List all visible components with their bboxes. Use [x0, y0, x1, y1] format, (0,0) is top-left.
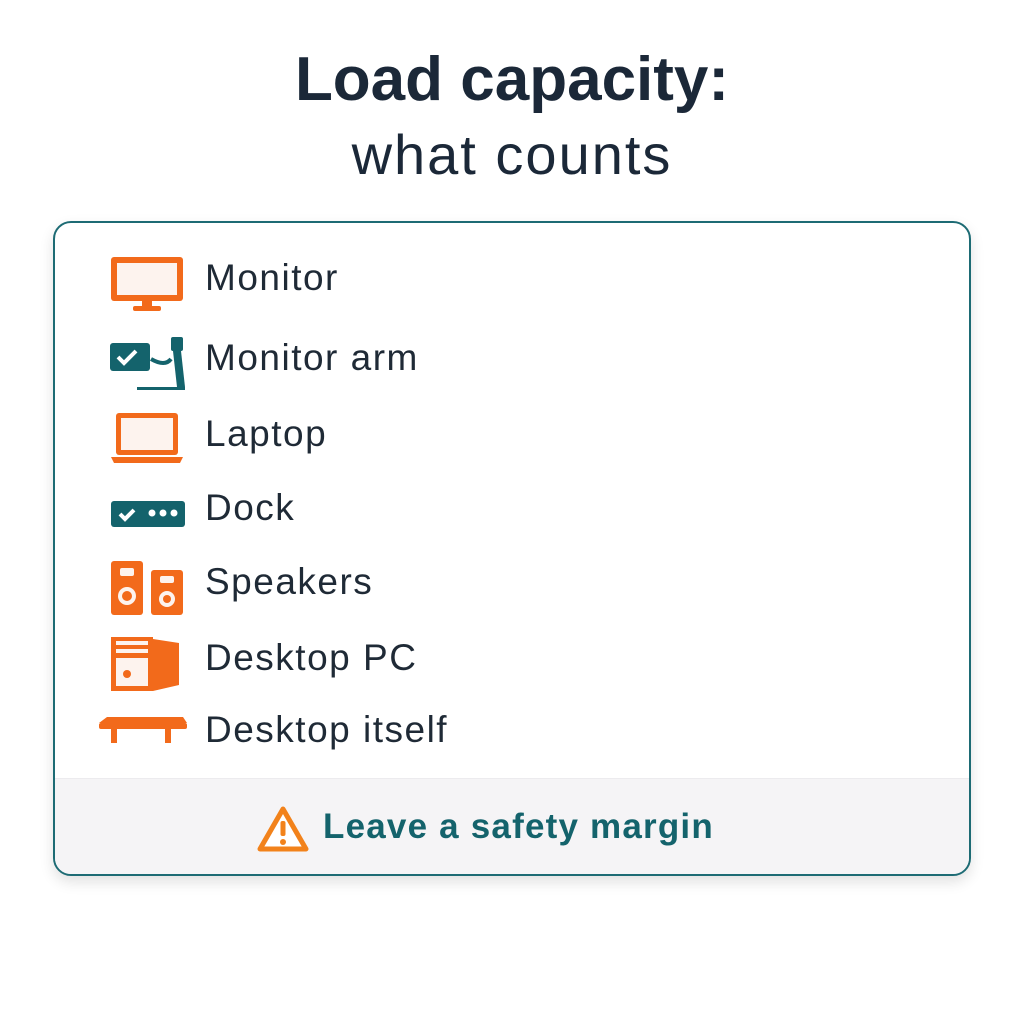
item: monitor [111, 257, 339, 311]
item: laptop: Laptop [205, 413, 327, 454]
item: desktop pc: Desktop PC [205, 637, 417, 678]
item: speakers: Speakers [205, 561, 373, 602]
item: desktop itself [99, 709, 448, 750]
footer: safety margin [55, 778, 969, 875]
item: desktop pc [111, 637, 417, 691]
footer text: Leave a safety margin [323, 807, 714, 846]
item: laptop [111, 413, 327, 463]
icon: warning [258, 806, 308, 852]
item: monitor: Monitor [205, 257, 339, 298]
item: dock [111, 487, 295, 528]
title: Load capacity: [295, 45, 729, 114]
item: speakers [111, 561, 373, 615]
item: dock: Dock [205, 487, 295, 528]
panel: items card [53, 221, 971, 876]
item: monitor arm: Monitor arm [205, 337, 419, 378]
subtitle: what counts [352, 123, 672, 186]
item: monitor arm [110, 337, 419, 390]
item: desktop itself: Desktop itself [205, 709, 448, 750]
